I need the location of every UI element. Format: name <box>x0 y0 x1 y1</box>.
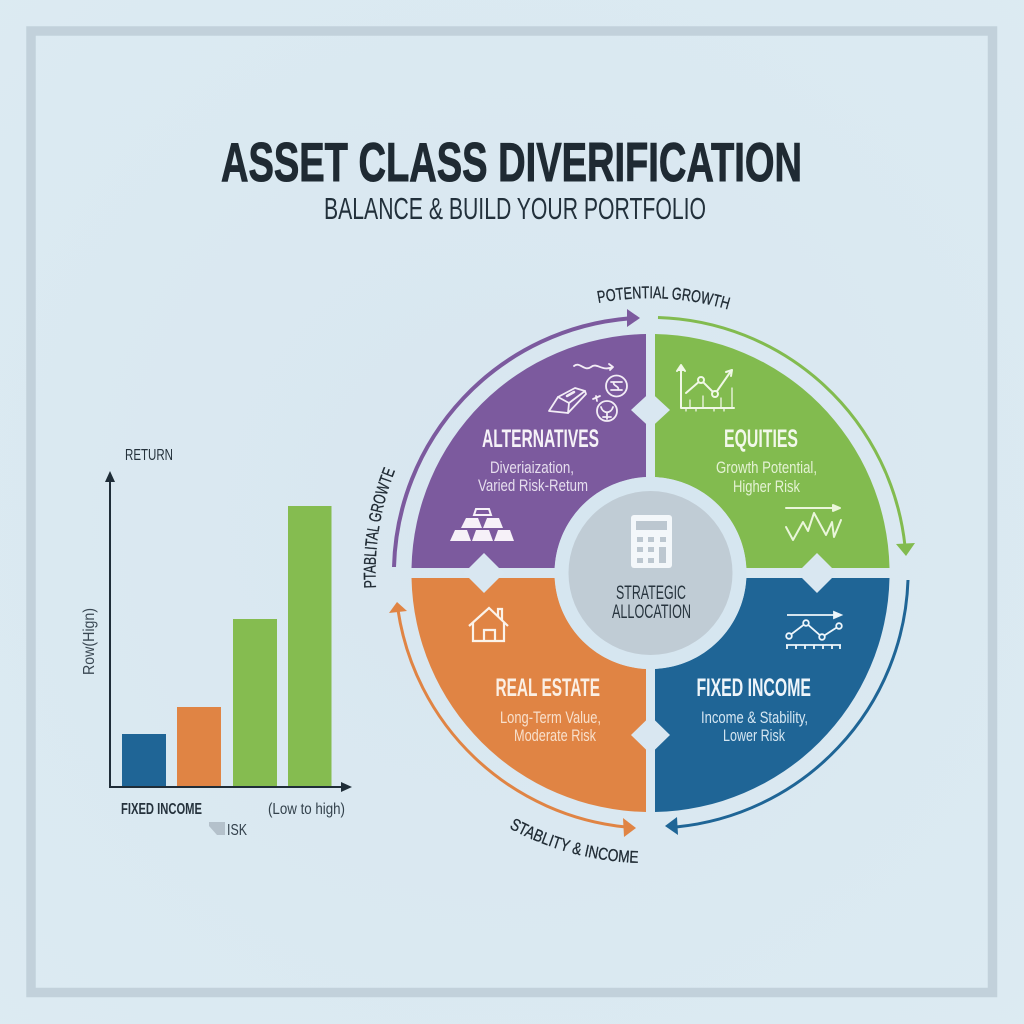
fixed income description: Lower Risk <box>723 726 785 745</box>
icon: volatile zigzag with arrow <box>786 505 841 540</box>
y axis title: RETURN <box>125 447 173 464</box>
panel: alternatives <box>412 334 646 568</box>
curved label: top: POTENTIAL GROWTH <box>597 286 730 310</box>
curved label: left: PTABLITAL GROWTE <box>364 466 396 588</box>
y axis side label: Row(Hign) <box>81 608 98 675</box>
subtitle: BALANCE & BUILD YOUR PORTFOLIO <box>324 191 706 226</box>
fixed income heading: FIXED INCOME <box>696 674 811 702</box>
alternatives heading: ALTERNATIVES <box>482 425 599 453</box>
x axis range label: (Low to high) <box>268 801 345 818</box>
x axis smudge mark <box>209 822 225 835</box>
bar: real estate <box>177 707 221 786</box>
x axis arrowhead <box>341 782 352 792</box>
equities heading: EQUITIES <box>724 425 798 453</box>
icon: stacked gold bars <box>450 509 514 541</box>
bar: equities <box>233 619 277 786</box>
calculator body <box>631 515 672 568</box>
alternatives description: Varied Risk-Retum <box>478 476 588 495</box>
panel: fixed income <box>655 578 890 812</box>
icon: house <box>469 608 508 641</box>
purple sector <box>412 334 646 568</box>
hub disc <box>568 491 732 655</box>
real estate description: Moderate Risk <box>514 726 596 745</box>
chart axes <box>110 478 345 787</box>
hub label: STRATEGIC <box>616 583 686 604</box>
icon: calculator <box>631 515 672 568</box>
blue sector <box>655 578 890 812</box>
x axis category label: FIXED INCOME <box>121 801 202 818</box>
center hub <box>554 477 746 669</box>
x axis title: ISK <box>227 822 247 839</box>
real estate description: Long-Term Value, <box>500 708 601 727</box>
arrow: orange double-headed <box>389 602 636 837</box>
arrow: green <box>658 318 915 556</box>
icon: rising line chart <box>677 365 734 411</box>
icon: steady line chart <box>786 612 842 649</box>
orange sector <box>412 578 646 812</box>
fixed income description: Income & Stability, <box>701 708 808 727</box>
arrow: blue <box>665 580 908 835</box>
circular diagram <box>364 286 915 863</box>
connector diamond: top <box>631 392 670 428</box>
hub label: ALLOCATION <box>612 602 691 623</box>
panel: equities <box>655 334 890 568</box>
bar: alternatives <box>288 506 332 786</box>
curved label: bottom: STABLITY & INCOME <box>510 818 638 863</box>
bar: fixed income <box>122 734 166 786</box>
connector diamond: bottom <box>631 716 670 754</box>
connector diamond: right <box>797 553 837 593</box>
arrow: purple <box>394 309 640 567</box>
y axis arrowhead <box>105 471 115 482</box>
icon: gold bar and exchange symbols <box>549 364 627 421</box>
equities description: Growth Potential, <box>716 458 817 477</box>
connector diamond: left <box>464 553 504 593</box>
bar chart: risk vs return <box>81 447 352 839</box>
equities description: Higher Risk <box>733 477 800 496</box>
alternatives description: Diveriaization, <box>490 458 574 477</box>
hub outer ring <box>554 477 746 669</box>
panel: real estate <box>412 578 646 812</box>
green sector <box>655 334 890 568</box>
calculator display and keys <box>636 521 667 563</box>
real estate heading: REAL ESTATE <box>496 674 600 702</box>
